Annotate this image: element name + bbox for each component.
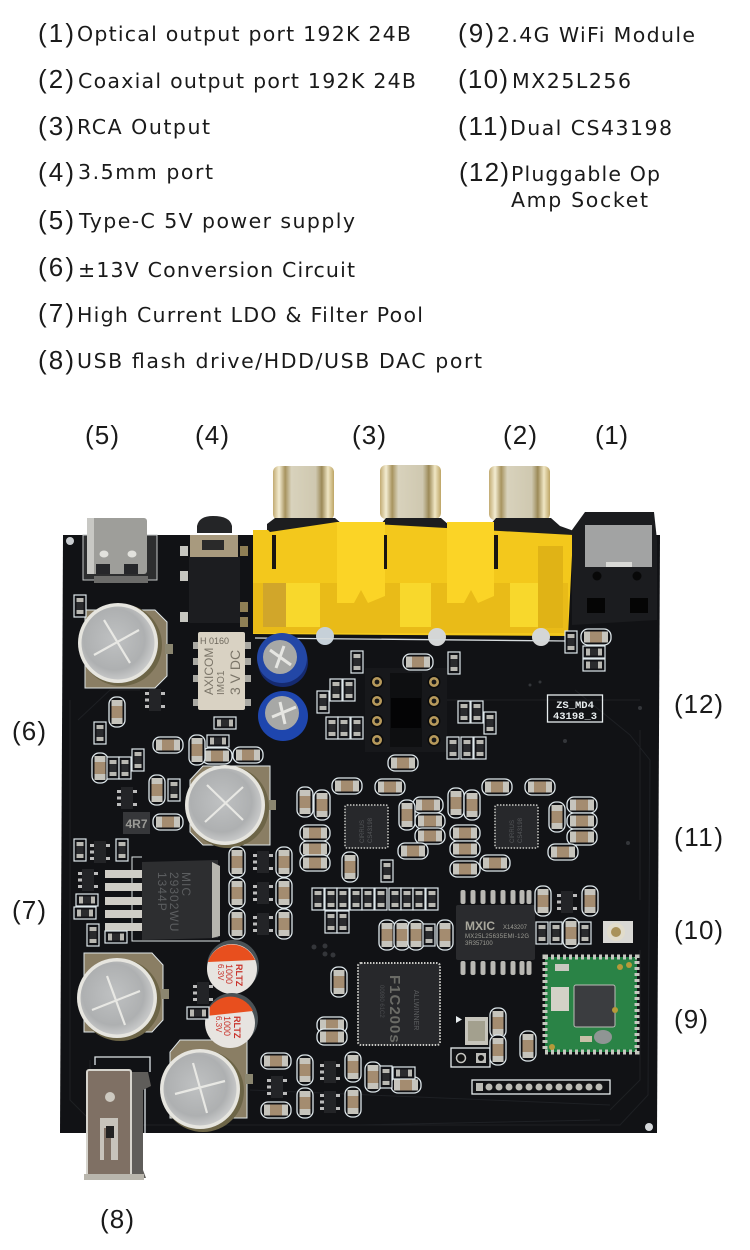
callout numbers on the diagram <box>12 420 723 1234</box>
relay <box>193 632 251 710</box>
callout 12: (12) <box>674 689 723 719</box>
electrolytic capacitor 2 <box>185 765 276 848</box>
DAC chip 1 <box>345 805 388 848</box>
callout 10: (10) <box>674 915 723 945</box>
red capacitors: 1000 <box>224 964 234 984</box>
callout 1: (1) <box>595 420 628 450</box>
silkscreen label: 43198_3 <box>553 711 597 723</box>
legend item 6 <box>38 252 355 282</box>
callout 3: (3) <box>352 420 386 450</box>
pin header strip <box>472 1080 610 1094</box>
legend item 8: (8) <box>38 345 74 375</box>
callout 9: (9) <box>674 1004 708 1034</box>
SMD resistors <box>74 595 605 1088</box>
legend item 10: (10) <box>458 64 508 94</box>
LDO regulator <box>105 857 220 941</box>
legend item 9: (9) <box>458 18 494 48</box>
SoC F1C200s: ALLWINNER <box>412 990 419 1030</box>
legend item 3 <box>38 111 210 141</box>
port: USB-A <box>84 1057 151 1180</box>
legend item 8: USB flash drive/HDD/USB DAC port <box>77 349 482 373</box>
legend item 4 <box>38 157 213 187</box>
legend item 7: (7) <box>38 298 74 328</box>
red capacitors: 6.3V <box>216 964 225 981</box>
callout 2: (2) <box>503 420 537 450</box>
legend item 9 <box>458 18 695 48</box>
legend item 6: (6) <box>38 252 74 282</box>
legend item 5: (5) <box>38 205 74 235</box>
flash chip MXIC <box>456 890 535 975</box>
PCB <box>60 535 660 1133</box>
legend item 1: Optical output port 192K 24B <box>77 22 411 46</box>
flash chip MXIC: X143207 <box>503 925 528 931</box>
relay: 3 V DC <box>227 650 243 695</box>
legend item 12 <box>459 157 660 212</box>
electrolytic capacitor 3 <box>77 953 169 1041</box>
SOT transistors and inductors: 4R7 <box>125 817 148 831</box>
legend item 12: Pluggable Op <box>511 162 660 186</box>
callout 6: (6) <box>12 716 46 746</box>
legend item 3: (3) <box>38 111 74 141</box>
port: 3.5mm jack <box>180 516 248 627</box>
silkscreen label <box>548 695 602 723</box>
DAC chip 1: CIRRUS <box>360 820 366 843</box>
legend item 2: Coaxial output port 192K 24B <box>78 69 416 93</box>
callout 7: (7) <box>12 895 46 925</box>
SoC F1C200s: F1C200s <box>386 975 403 1044</box>
red capacitors: 1000 <box>222 1016 232 1036</box>
DAC chip 1: CS43198 <box>368 817 374 843</box>
DAC chip 2: CS43198 <box>518 817 524 843</box>
flash chip MXIC: MXIC <box>465 919 495 933</box>
legend: port list, right column <box>458 18 695 212</box>
legend item 11: Dual CS43198 <box>510 116 672 140</box>
silkscreen label: ZS_MD4 <box>556 700 594 712</box>
LDO regulator: 1344P <box>155 872 169 912</box>
crystal oscillator <box>456 1016 488 1045</box>
antenna connector <box>603 921 633 943</box>
legend item 11 <box>458 111 672 141</box>
SoC F1C200s: 00980 61C2 <box>378 985 384 1018</box>
legend: port list, left column <box>38 18 482 375</box>
WiFi module <box>545 957 637 1052</box>
red capacitors: 6.3V <box>214 1016 223 1033</box>
circuit board photo <box>60 465 660 1180</box>
port: USB Type-C <box>83 518 157 583</box>
legend item 6: ±13V Conversion Circuit <box>78 258 355 282</box>
LDO regulator: 29302WU <box>167 872 181 932</box>
electrolytic capacitor 4 <box>160 1040 253 1132</box>
legend item 12: (12) <box>459 157 509 187</box>
RCA yellow housing <box>253 522 573 646</box>
DAC chip 2 <box>495 805 538 848</box>
legend item 10: MX25L256 <box>512 69 631 93</box>
legend item 4: (4) <box>38 157 74 187</box>
legend item 7: High Current LDO & Filter Pool <box>77 303 423 327</box>
flash chip MXIC: MX25L25635EMI-12G <box>465 934 529 940</box>
port: optical output <box>572 512 657 625</box>
red capacitors: RLTZ <box>232 1016 242 1039</box>
LDO regulator: MIC <box>179 872 193 897</box>
DAC chip 2: CIRRUS <box>510 820 516 843</box>
relay: IMO1 <box>216 670 227 695</box>
callout 5: (5) <box>85 420 119 450</box>
flash chip MXIC: 3R357100 <box>465 941 493 947</box>
red capacitors <box>205 940 259 1048</box>
callout 4: (4) <box>195 420 229 450</box>
legend item 4: 3.5mm port <box>78 160 213 184</box>
SoC F1C200s <box>358 963 440 1045</box>
legend item 9: 2.4G WiFi Module <box>497 23 695 47</box>
op amp socket <box>365 668 447 752</box>
two-pin header <box>451 1048 490 1067</box>
port: gold RCA jacks <box>267 465 574 540</box>
legend item 3: RCA Output <box>77 115 210 139</box>
legend item 5: Type-C 5V power supply <box>78 209 355 233</box>
SOT transistors and inductors <box>78 689 577 1113</box>
relay: AXICOM <box>202 648 216 695</box>
electrolytic capacitor 1 <box>78 603 173 688</box>
legend item 10 <box>458 64 631 94</box>
callout 11: (11) <box>674 822 723 852</box>
red capacitors: RLTZ <box>234 964 244 987</box>
legend item 11: (11) <box>458 111 508 141</box>
blue capacitors <box>257 633 308 741</box>
legend item 2: (2) <box>38 64 74 94</box>
relay: H 0160 <box>200 636 229 646</box>
SMD capacitors <box>92 629 611 1118</box>
legend item 5 <box>38 205 355 235</box>
legend item 1: (1) <box>38 18 74 48</box>
legend item 12: Amp Socket <box>511 188 648 212</box>
callout 8: (8) <box>100 1204 134 1234</box>
